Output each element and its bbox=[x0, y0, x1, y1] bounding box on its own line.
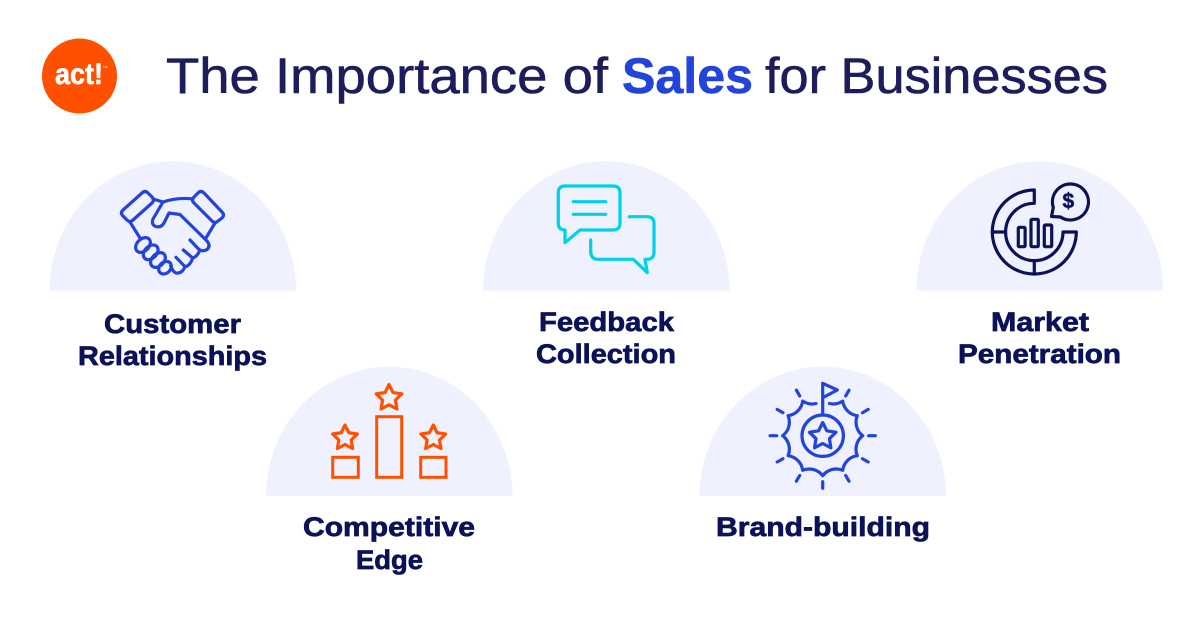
label: Edge bbox=[356, 545, 423, 575]
title: The Importance of bbox=[166, 48, 608, 104]
icon: handshake bbox=[122, 192, 224, 277]
title: for Businesses bbox=[765, 48, 1108, 104]
panel: customer relationships bbox=[50, 161, 296, 371]
panel: competitive edge bbox=[266, 367, 512, 575]
semicircle background bbox=[483, 161, 730, 290]
label bbox=[958, 307, 1121, 369]
label: Competitive bbox=[303, 512, 475, 542]
icon: badge with flag and star bbox=[770, 383, 875, 488]
label: Collection bbox=[536, 339, 676, 369]
icon: donut chart with dollar bubble: $ bbox=[1062, 190, 1074, 213]
label: Customer bbox=[104, 309, 242, 339]
title bbox=[166, 48, 1108, 104]
logo: act!: act! bbox=[55, 58, 103, 91]
icon: donut chart with dollar bubble bbox=[992, 184, 1088, 274]
icon: podium with stars bbox=[333, 384, 446, 477]
label: Relationships bbox=[78, 341, 267, 371]
semicircle background bbox=[50, 161, 296, 290]
label bbox=[303, 512, 475, 575]
logo: act! bbox=[42, 38, 117, 114]
panel: market penetration bbox=[916, 161, 1163, 369]
label bbox=[536, 307, 676, 369]
label bbox=[78, 309, 267, 371]
label: Penetration bbox=[958, 339, 1121, 369]
semicircle background bbox=[916, 161, 1163, 290]
icon: chat bubbles bbox=[558, 186, 654, 273]
semicircle background bbox=[700, 367, 946, 496]
semicircle background bbox=[266, 367, 512, 496]
panel: feedback collection bbox=[483, 161, 730, 369]
panel: brand-building bbox=[700, 367, 946, 542]
title: Sales bbox=[622, 48, 753, 104]
logo: act!: TM bbox=[103, 65, 108, 69]
label: Feedback bbox=[539, 307, 675, 337]
label: Brand-building bbox=[716, 512, 930, 542]
label: Market bbox=[991, 307, 1089, 337]
